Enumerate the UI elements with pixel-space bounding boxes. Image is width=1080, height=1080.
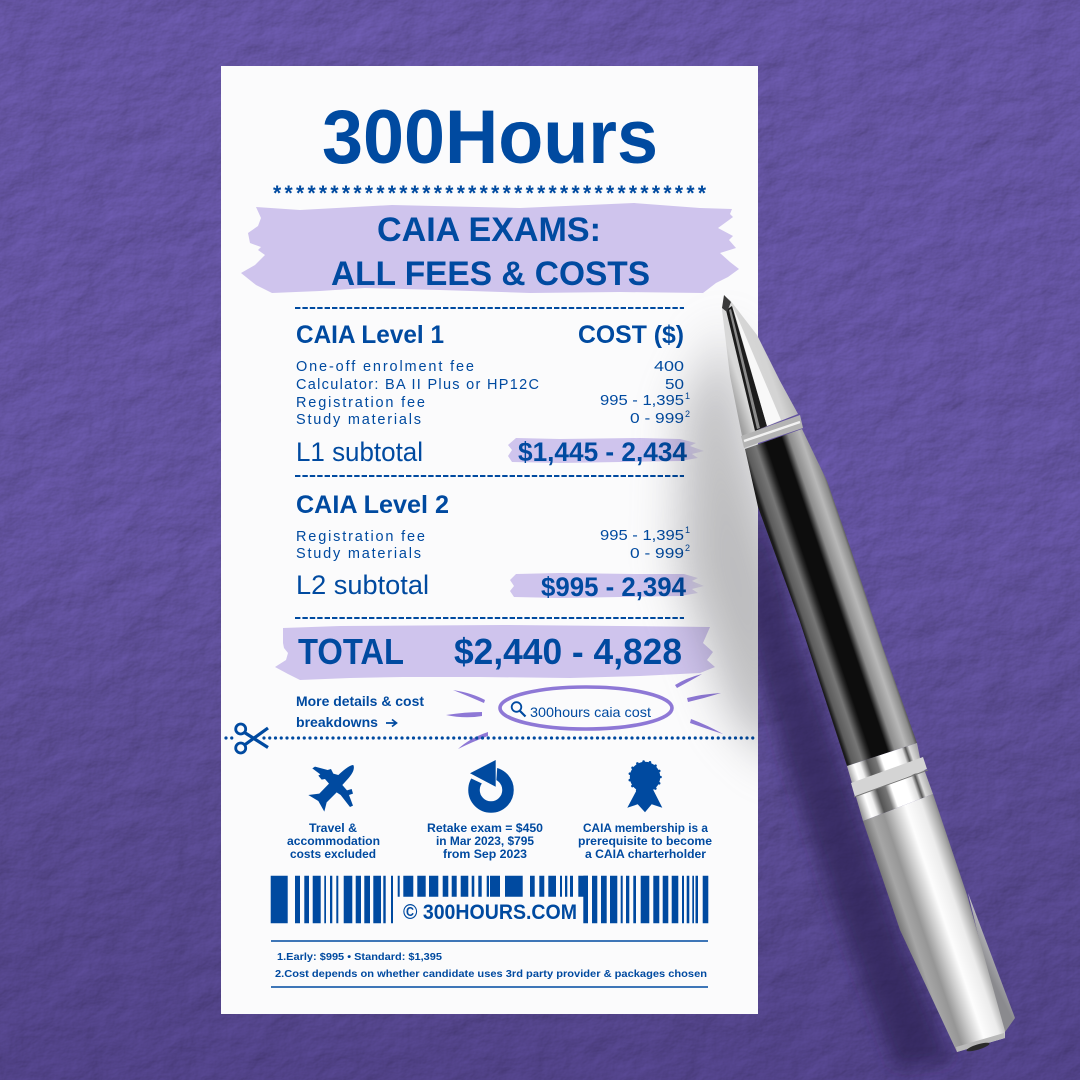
retake text: from Sep 2023 <box>443 847 527 861</box>
level 1 line items: 50 <box>665 377 684 393</box>
more details text: More details & cost <box>296 693 424 709</box>
barcode label: © 300HOURS.COM <box>403 901 577 924</box>
pen shadow on background <box>738 490 952 1068</box>
level 2 line items: 2 <box>685 543 690 553</box>
pen silver tip <box>722 296 798 436</box>
pen lower barrel <box>863 794 1005 1052</box>
pen <box>722 295 1015 1053</box>
pen clip <box>968 893 1015 1032</box>
level 1 line items: 400 <box>654 359 684 375</box>
L1 subtotal: $1,445 - 2,434 <box>518 437 687 467</box>
note: retake <box>427 756 543 861</box>
level 2 line items: Registration fee <box>296 529 425 545</box>
level 2 line items <box>296 525 690 562</box>
L1 subtotal: L1 subtotal <box>296 437 423 467</box>
L2 subtotal: $995 - 2,394 <box>541 572 686 602</box>
heading: CAIA exams all fees and costs <box>241 203 739 293</box>
level 1 line items <box>296 359 690 428</box>
panel: receipt paper <box>221 66 758 1014</box>
level 1 line items: Study materials <box>296 412 421 428</box>
retake text: in Mar 2023, $795 <box>436 834 534 848</box>
footnotes: 1.Early: $995 • Standard: $1,395 <box>277 951 442 963</box>
search text: 300hours caia cost <box>530 704 651 720</box>
membership text: a CAIA charterholder <box>585 847 706 861</box>
pen collar <box>741 415 803 448</box>
travel text: Travel & <box>309 821 357 835</box>
total row: $2,440 - 4,828 <box>454 631 682 672</box>
level 1 line items: Registration fee <box>296 395 425 411</box>
icon: rosette <box>627 762 662 812</box>
note: membership <box>578 762 712 861</box>
retake text: Retake exam = $450 <box>427 821 543 835</box>
footnotes <box>271 941 708 987</box>
L2 subtotal: L2 subtotal <box>296 570 429 600</box>
heading: CAIA exams all fees and costs: ALL FEES & COSTS <box>331 255 650 293</box>
travel text <box>287 821 380 861</box>
icon: plane <box>308 765 354 812</box>
total row <box>275 625 715 680</box>
brand title: 300Hours <box>322 95 658 180</box>
retake text <box>427 821 543 861</box>
level 1 line items: 995 - 1,395 <box>600 393 684 409</box>
icon: retake arrow <box>466 756 508 807</box>
more details text: breakdowns <box>296 714 378 730</box>
search callout <box>446 674 723 749</box>
note: travel <box>287 765 380 861</box>
level 2 line items: 0 - 999 <box>630 546 684 562</box>
L2 subtotal <box>296 570 704 602</box>
footnotes: 2.Cost depends on whether candidate uses 3rd party provider & packages chosen <box>275 968 707 980</box>
level 2 line items: 995 - 1,395 <box>600 528 684 544</box>
level 2 line items: 1 <box>685 525 690 535</box>
level 1 line items: 1 <box>685 391 690 401</box>
pen metal bands <box>847 743 933 821</box>
level 1 line items: One-off enrolment fee <box>296 359 474 375</box>
level 1 heading: CAIA Level 1 <box>296 321 444 349</box>
pen end cap <box>956 1033 1005 1052</box>
pen nib <box>722 295 731 312</box>
membership text <box>578 821 712 861</box>
icon: magnifier <box>512 702 526 716</box>
heading: CAIA exams all fees and costs: CAIA EXAMS: <box>377 211 601 249</box>
barcode <box>271 876 708 924</box>
cost column heading: COST ($) <box>578 321 684 349</box>
membership text: prerequisite to become <box>578 834 712 848</box>
level 2 line items: Study materials <box>296 546 421 562</box>
L1 subtotal <box>296 437 704 467</box>
level 1 line items: 0 - 999 <box>630 411 684 427</box>
search oval <box>500 687 672 729</box>
section: CAIA Level 1 <box>296 321 704 467</box>
total row: TOTAL <box>298 631 404 672</box>
level 1 line items: Calculator: BA II Plus or HP12C <box>296 377 539 393</box>
level 1 line items: 2 <box>685 409 690 419</box>
travel text: costs excluded <box>290 847 376 861</box>
pen black body <box>745 429 917 766</box>
icon: scissors <box>236 724 268 753</box>
emphasis rays <box>446 674 723 749</box>
pen shadow on paper <box>655 330 758 769</box>
travel text: accommodation <box>287 834 380 848</box>
more details text <box>296 693 424 730</box>
asterisk divider: ************************************** <box>273 182 707 205</box>
level 2 heading: CAIA Level 2 <box>296 491 449 519</box>
membership text: CAIA membership is a <box>583 821 708 835</box>
section: CAIA Level 2 <box>296 491 704 602</box>
